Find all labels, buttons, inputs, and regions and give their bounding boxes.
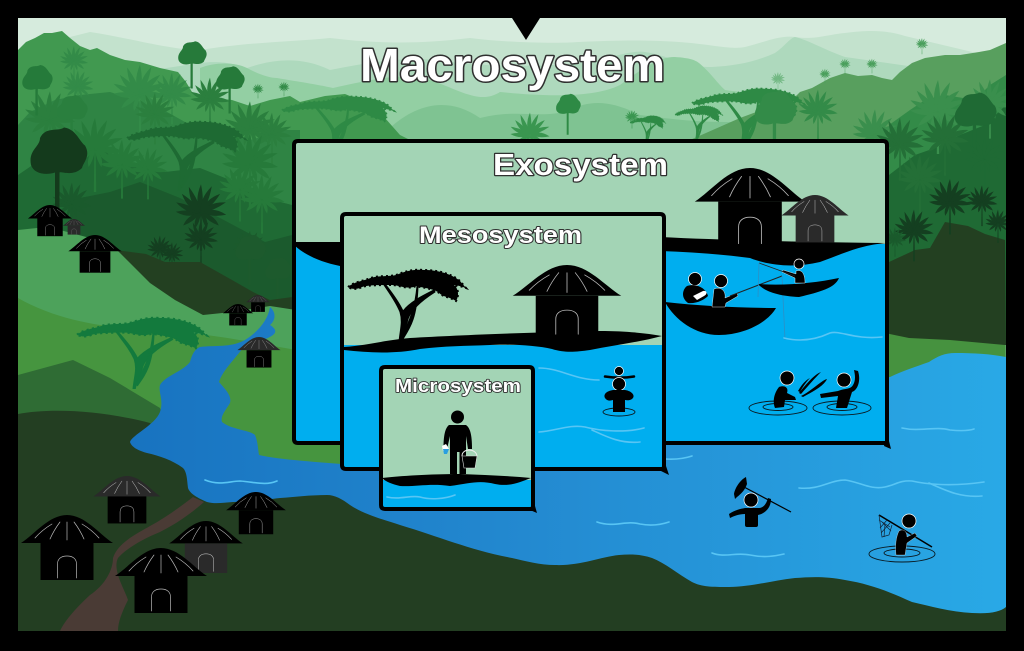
- left forest ridge: [18, 31, 408, 140]
- acacia trees in the forest: [126, 88, 807, 170]
- dark forest ground right: [889, 222, 1006, 345]
- person with a net: [869, 514, 935, 562]
- upper meadow: [18, 228, 292, 350]
- mid meadow: [18, 298, 340, 464]
- hut: [68, 235, 122, 273]
- child on adult's shoulders: [603, 366, 635, 416]
- exosystem sky: [294, 141, 887, 443]
- hut: [28, 205, 72, 236]
- mesosystem waves: [539, 368, 644, 442]
- mesosystem water: [342, 345, 664, 469]
- dirt path: [60, 497, 204, 631]
- distant hills: [70, 31, 974, 139]
- small canoe with fisher: [758, 259, 839, 297]
- microsystem sky: [381, 367, 533, 509]
- mesosystem corner notch: [661, 466, 669, 475]
- trees and palms above exosystem: [510, 38, 928, 139]
- children splashing: [749, 370, 871, 415]
- round trees left: [22, 41, 259, 238]
- mesosystem hut: [513, 265, 621, 336]
- exosystem water: [294, 244, 887, 441]
- meadow acacia tree: [77, 318, 207, 389]
- forest deep layer left: [18, 152, 292, 242]
- forest layer right mid: [889, 75, 1006, 175]
- mesosystem sky: [342, 214, 664, 469]
- river: [130, 307, 1006, 613]
- meadow right of the exosystem: [889, 334, 1005, 378]
- microsystem border: [381, 367, 533, 509]
- sky: [18, 18, 1006, 53]
- exosystem waves: [784, 332, 882, 340]
- hut: [21, 515, 113, 580]
- right forest ridge: [690, 43, 1006, 360]
- hut: [226, 492, 286, 534]
- pointer triangle: [512, 18, 540, 40]
- acacia tree: [348, 270, 466, 342]
- heading: Mesosystem: Mesosystem: [419, 222, 582, 249]
- mesosystem border: [342, 214, 664, 469]
- hut: [115, 548, 207, 613]
- hut: [246, 295, 270, 312]
- big canoe with two people: [665, 272, 785, 340]
- heading: Exosystem: Exosystem: [493, 147, 668, 182]
- palms right: [852, 79, 1013, 261]
- forest darkest layer left: [70, 182, 292, 300]
- forest layer right deep: [889, 105, 1006, 345]
- village huts: [21, 205, 286, 613]
- person with bucket: [442, 410, 477, 474]
- hut: [93, 476, 161, 523]
- hut: [169, 521, 243, 573]
- palms left: [24, 46, 292, 275]
- exosystem border: [294, 141, 887, 443]
- microsystem corner notch: [530, 506, 537, 513]
- exosystem huts: [695, 168, 849, 246]
- microsystem water: [381, 480, 533, 509]
- dark slope behind the village: [118, 250, 292, 315]
- person spearing a fish: [729, 477, 791, 527]
- dark ground: [18, 411, 1006, 631]
- panel: exosystem: [294, 141, 891, 449]
- exosystem corner notch: [884, 441, 891, 449]
- exosystem land: [294, 237, 887, 266]
- microsystem wave: [387, 495, 455, 499]
- mesosystem land: [344, 331, 662, 352]
- panel: mesosystem: [342, 214, 669, 475]
- hut: [237, 337, 281, 368]
- green hill: [18, 360, 160, 424]
- forest mid layer left: [18, 92, 300, 205]
- panel: microsystem: [381, 367, 537, 513]
- river waves: [205, 428, 984, 557]
- title: Macrosystem: Macrosystem: [360, 39, 665, 91]
- hut: [223, 304, 253, 325]
- microsystem land: [382, 474, 531, 486]
- hut: [63, 219, 85, 235]
- heading: Microsystem: Microsystem: [395, 375, 521, 396]
